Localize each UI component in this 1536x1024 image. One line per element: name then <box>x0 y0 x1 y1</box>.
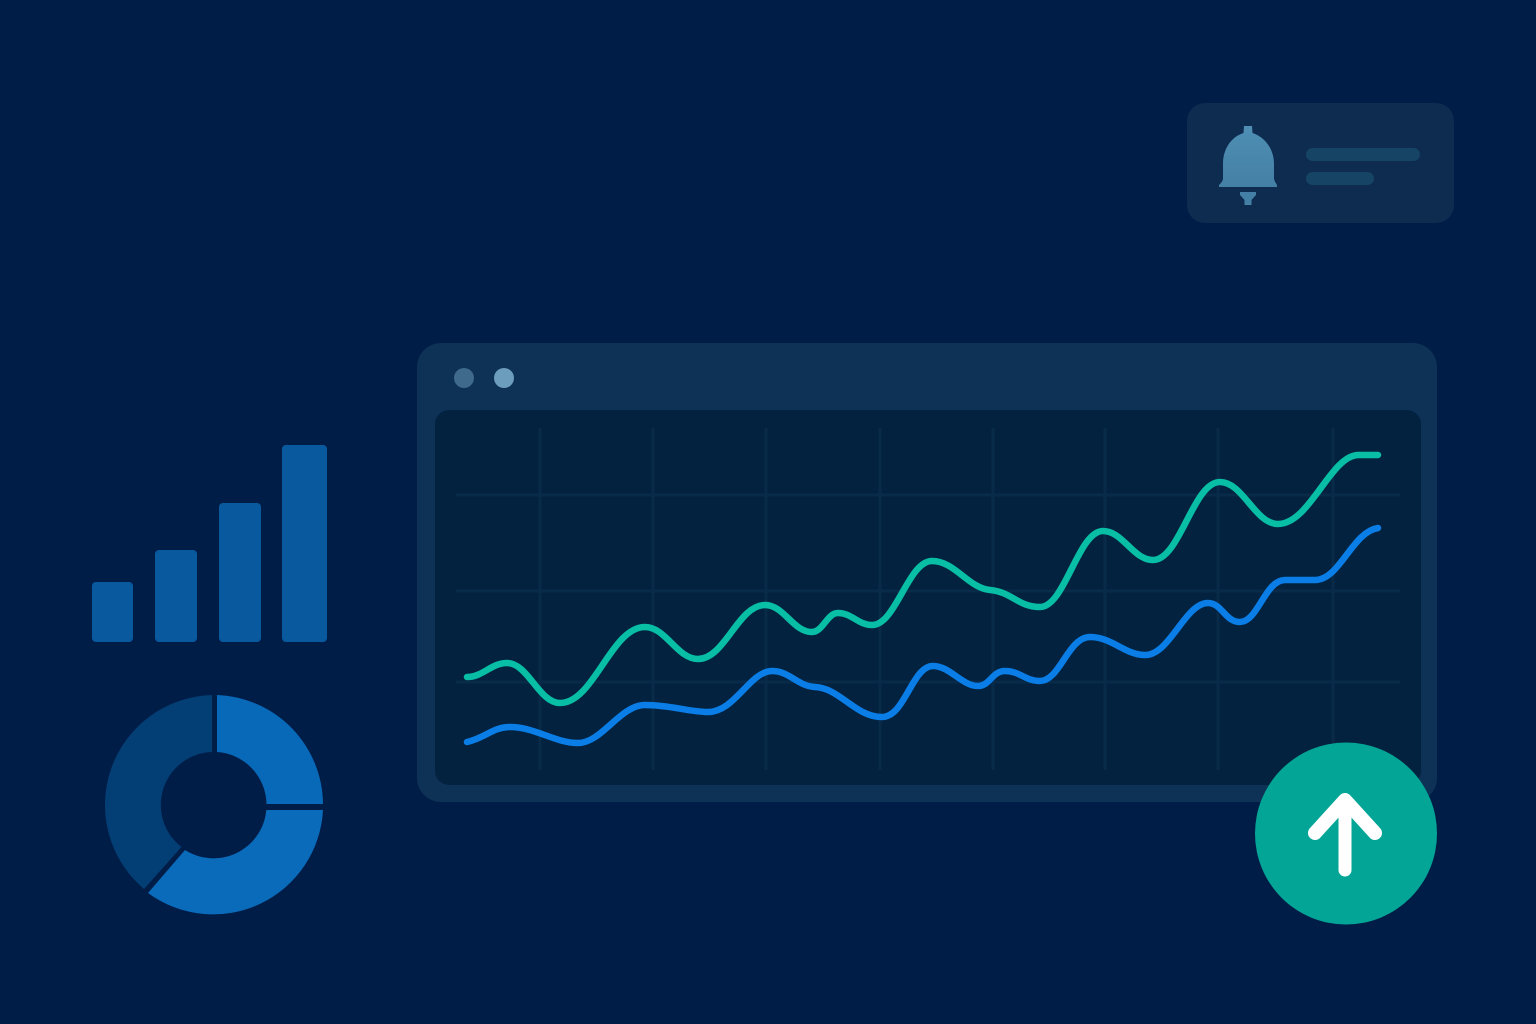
arrow <box>1315 800 1375 870</box>
notification text placeholder lines <box>1306 148 1420 185</box>
icon: bell <box>1219 126 1277 205</box>
line chart: green series <box>467 455 1378 703</box>
panel: notification card <box>1187 103 1454 223</box>
window control dots <box>454 368 514 388</box>
line chart: blue series <box>467 528 1378 743</box>
notification card background <box>1187 103 1454 223</box>
icon: upward arrow badge <box>1255 742 1437 924</box>
donut chart <box>105 695 323 914</box>
bar chart <box>92 445 327 642</box>
panel: browser window <box>417 343 1437 802</box>
chart area <box>435 410 1421 785</box>
window frame <box>417 343 1437 802</box>
